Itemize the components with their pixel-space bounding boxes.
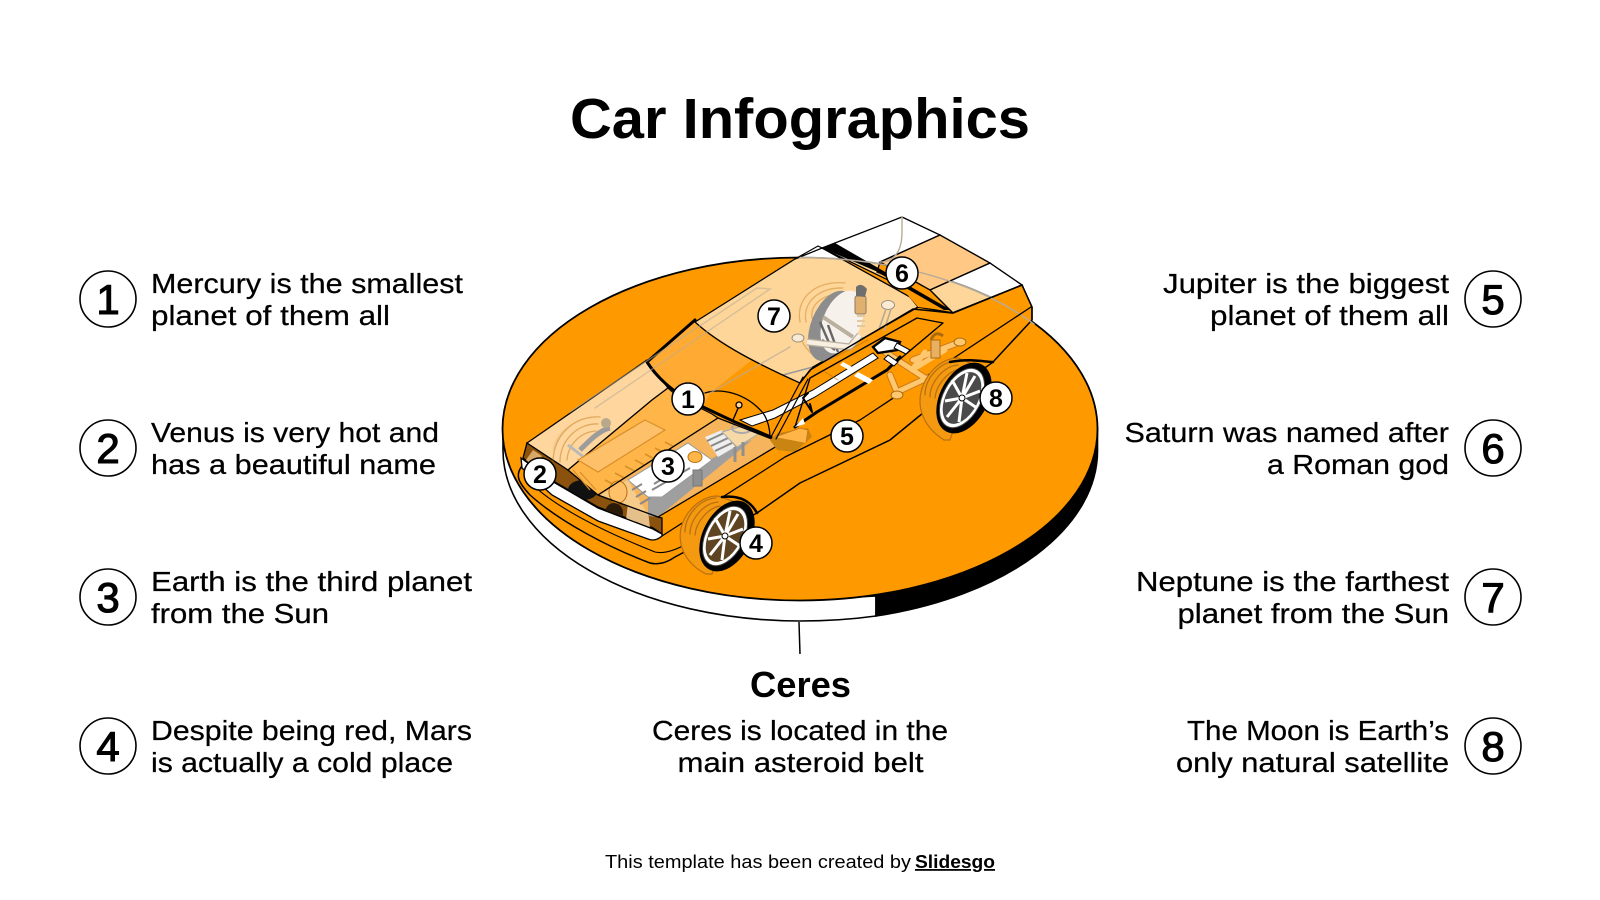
title: Car Infographics xyxy=(570,87,1030,151)
trunk rear panel xyxy=(822,217,950,310)
rear wheel xyxy=(920,353,1003,443)
center callout: Ceres xyxy=(652,664,948,778)
list item 2 xyxy=(80,417,439,480)
list item 1: Mercury is the smallest xyxy=(151,268,463,299)
badge 2: 2 xyxy=(533,461,547,489)
list item 1: 1 xyxy=(96,276,120,323)
list item 6 xyxy=(1124,417,1521,480)
dash shadow xyxy=(770,428,812,452)
badge 5: 5 xyxy=(840,423,854,451)
list item 7: planet from the Sun xyxy=(1178,598,1449,629)
list item 3: Earth is the third planet xyxy=(151,566,472,597)
front fascia xyxy=(523,443,662,534)
illustration: car on orange disc xyxy=(502,217,1098,621)
list item 1 xyxy=(80,268,463,331)
roof ghost line xyxy=(710,347,790,393)
list item 8: The Moon is Earth’s xyxy=(1187,715,1449,746)
windshield frame xyxy=(647,320,771,437)
door white tip xyxy=(795,418,805,427)
door lower thick edge xyxy=(795,357,900,427)
roof side line xyxy=(800,285,1032,383)
list item 6: 6 xyxy=(1481,425,1505,472)
list item 5: 5 xyxy=(1481,276,1505,323)
badge 3 xyxy=(652,450,684,482)
rear suspension xyxy=(825,334,966,399)
list item 3: from the Sun xyxy=(151,598,329,629)
center callout: Ceres: Ceres is located in the xyxy=(652,715,948,746)
list item 5: planet of them all xyxy=(1210,300,1449,331)
badge 1: 1 xyxy=(681,386,695,414)
rear wheel arch top xyxy=(950,360,993,362)
list item 6: a Roman god xyxy=(1267,449,1449,480)
badge 7: 7 xyxy=(767,303,781,331)
center callout: Ceres: main asteroid belt xyxy=(678,747,924,778)
door window frame xyxy=(795,318,943,427)
list item 8: only natural satellite xyxy=(1176,747,1449,778)
list item 7: Neptune is the farthest xyxy=(1136,566,1449,597)
engine tan end xyxy=(600,480,648,515)
engine white block xyxy=(628,443,712,497)
seen-through disc edge and ghost pillar xyxy=(800,217,1034,324)
far front wheel ghost xyxy=(552,417,611,462)
rear body crease xyxy=(662,307,1031,536)
list item 2: has a beautiful name xyxy=(151,449,436,480)
footer credit: Slidesgo xyxy=(915,852,995,872)
door strut xyxy=(803,393,812,412)
hood far strip xyxy=(527,360,668,470)
rear deck orange xyxy=(877,272,950,311)
list item 6: Saturn was named after xyxy=(1124,417,1449,448)
door center white box xyxy=(840,338,910,384)
list item 3: 3 xyxy=(96,574,120,621)
leader line xyxy=(799,622,800,654)
list item 5 xyxy=(1163,268,1521,331)
disc base xyxy=(502,258,1098,621)
spoiler left sliver xyxy=(795,246,822,259)
list item 4 xyxy=(80,715,472,778)
badge 6 xyxy=(886,257,918,289)
list item 8: 8 xyxy=(1481,723,1505,770)
hood middle strip xyxy=(568,388,718,495)
oil cap xyxy=(688,452,702,462)
trunk white band xyxy=(930,263,1022,313)
badge 2 xyxy=(524,458,556,490)
windshield lighter band xyxy=(647,322,752,407)
car lower body xyxy=(518,285,1032,564)
ghost engine in middle strip xyxy=(573,420,680,490)
badge 8 xyxy=(980,382,1012,414)
badge 3: 3 xyxy=(661,453,675,481)
badge 4: 4 xyxy=(749,530,763,558)
wiper strips xyxy=(740,353,878,426)
front wheel arch top xyxy=(722,497,757,513)
badge 5 xyxy=(831,420,863,452)
back window thick line xyxy=(822,243,951,310)
list item 7 xyxy=(1136,566,1521,629)
far rear wheel ghost xyxy=(792,283,894,368)
list item 2: 2 xyxy=(96,425,120,472)
windshield xyxy=(647,322,800,437)
badge 1 xyxy=(672,383,704,415)
gear stick xyxy=(733,402,742,420)
list item 4: is actually a cold place xyxy=(151,747,453,778)
dash arc xyxy=(705,391,770,437)
list item 4: 4 xyxy=(96,723,120,770)
badge 4 xyxy=(740,527,772,559)
front bumper xyxy=(521,458,662,540)
center callout: Ceres: Ceres xyxy=(750,664,851,705)
list item 1: planet of them all xyxy=(151,300,390,331)
list item 7: 7 xyxy=(1481,574,1505,621)
list item 8 xyxy=(1176,715,1521,778)
list item 2: Venus is very hot and xyxy=(151,417,439,448)
hood ghost line xyxy=(570,288,770,412)
list item 4: Despite being red, Mars xyxy=(151,715,472,746)
valve stacks xyxy=(705,430,735,457)
trunk pale band xyxy=(880,235,990,290)
front wheel xyxy=(680,491,766,581)
badge 6: 6 xyxy=(895,260,909,288)
bumper lower crease xyxy=(526,478,690,553)
hood right strip with engine xyxy=(598,418,782,517)
badge 8: 8 xyxy=(989,385,1003,413)
list item 5: Jupiter is the biggest xyxy=(1163,268,1449,299)
footer credit: This template has been created by xyxy=(605,852,911,872)
list item 3 xyxy=(80,566,472,629)
roof panel xyxy=(695,248,918,383)
A-pillar xyxy=(771,377,808,439)
badge 7 xyxy=(758,300,790,332)
